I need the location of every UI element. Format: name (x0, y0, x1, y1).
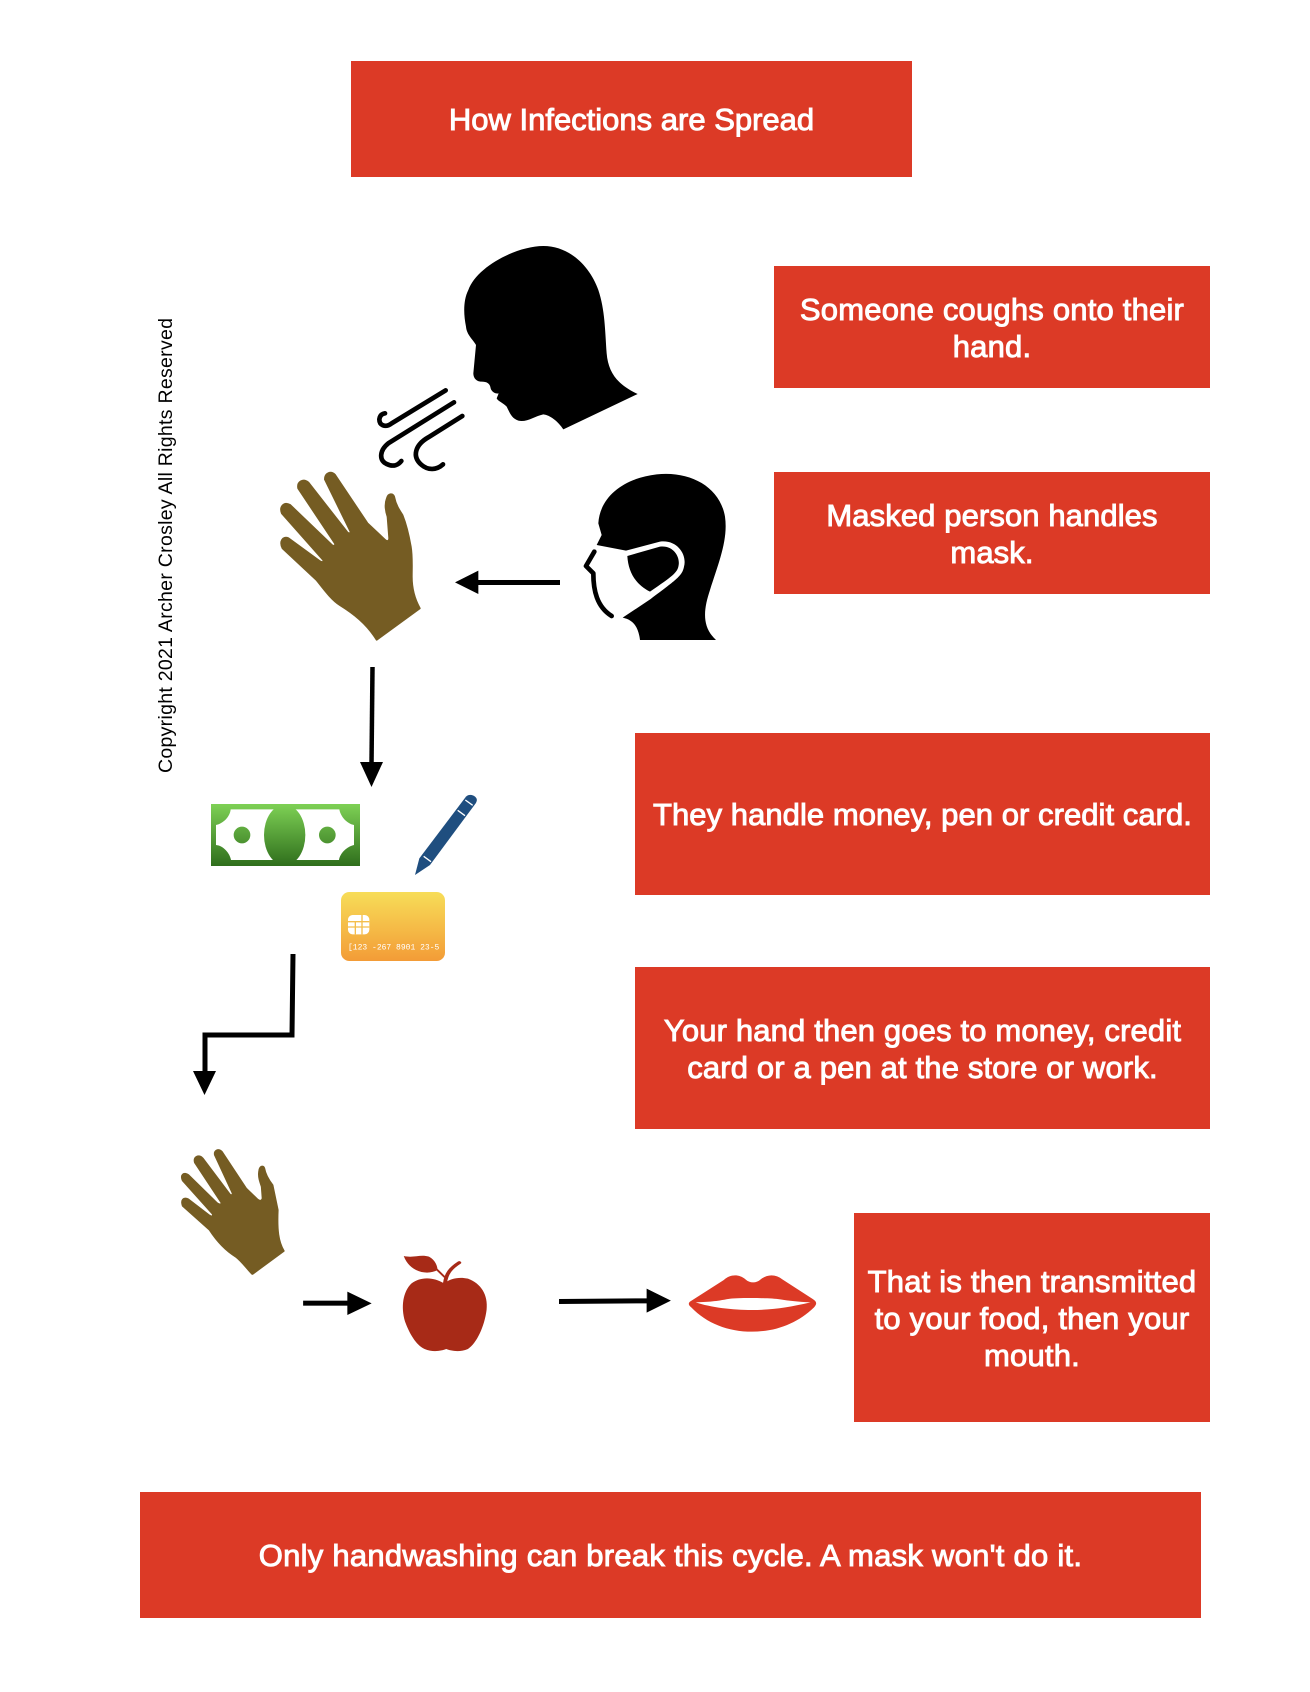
step: food then mouth (854, 1213, 1210, 1422)
step: masked person: Masked person handles (826, 498, 1158, 532)
step: masked person (774, 472, 1210, 594)
icon: credit card (341, 892, 445, 961)
step: food then mouth: mouth. (984, 1338, 1080, 1372)
title (351, 61, 912, 177)
step: food then mouth: to your food, then your (875, 1300, 1189, 1336)
icon: credit card: [123 -267 8901 23-5 (348, 944, 440, 953)
icon: masked head (577, 474, 726, 640)
step: masked person: mask. (950, 534, 1034, 570)
arrow: apple to mouth (559, 1289, 671, 1313)
step: hand goes to money: card or a pen at the store or work. (687, 1050, 1158, 1084)
step: someone coughs: Someone coughs onto their (800, 292, 1184, 326)
step: food then mouth: That is then transmitted (868, 1264, 1196, 1298)
step: hand goes to money (635, 967, 1210, 1129)
step: someone coughs: hand. (953, 328, 1031, 364)
arrow: hand to apple (303, 1292, 372, 1315)
copyright note: Copyright 2021 Archer Crosley All Rights Reserved (155, 318, 177, 773)
icon: brown hand large (281, 473, 420, 640)
step: hand goes to money: Your hand then goes to money, credit (664, 1012, 1181, 1048)
arrow: hand to money (360, 667, 383, 787)
arrow: mask to hand (455, 571, 560, 594)
step: handle money: They handle money, pen or credit card. (653, 797, 1192, 832)
icon: pen (415, 795, 477, 875)
icon: apple (403, 1256, 487, 1351)
icon: money bill (211, 804, 360, 866)
icon: coughing head (464, 246, 638, 429)
step: handle money (635, 733, 1210, 895)
icon: brown hand small (182, 1150, 284, 1274)
step: someone coughs (774, 266, 1210, 388)
conclusion banner: Only handwashing can break this cycle. A mask won't do it. (259, 1538, 1082, 1573)
arrow: card to second hand (193, 954, 293, 1095)
conclusion banner (140, 1492, 1201, 1618)
title: How Infections are Spread (449, 102, 814, 137)
icon: lips (689, 1275, 816, 1332)
icon: cough air lines (379, 390, 462, 469)
